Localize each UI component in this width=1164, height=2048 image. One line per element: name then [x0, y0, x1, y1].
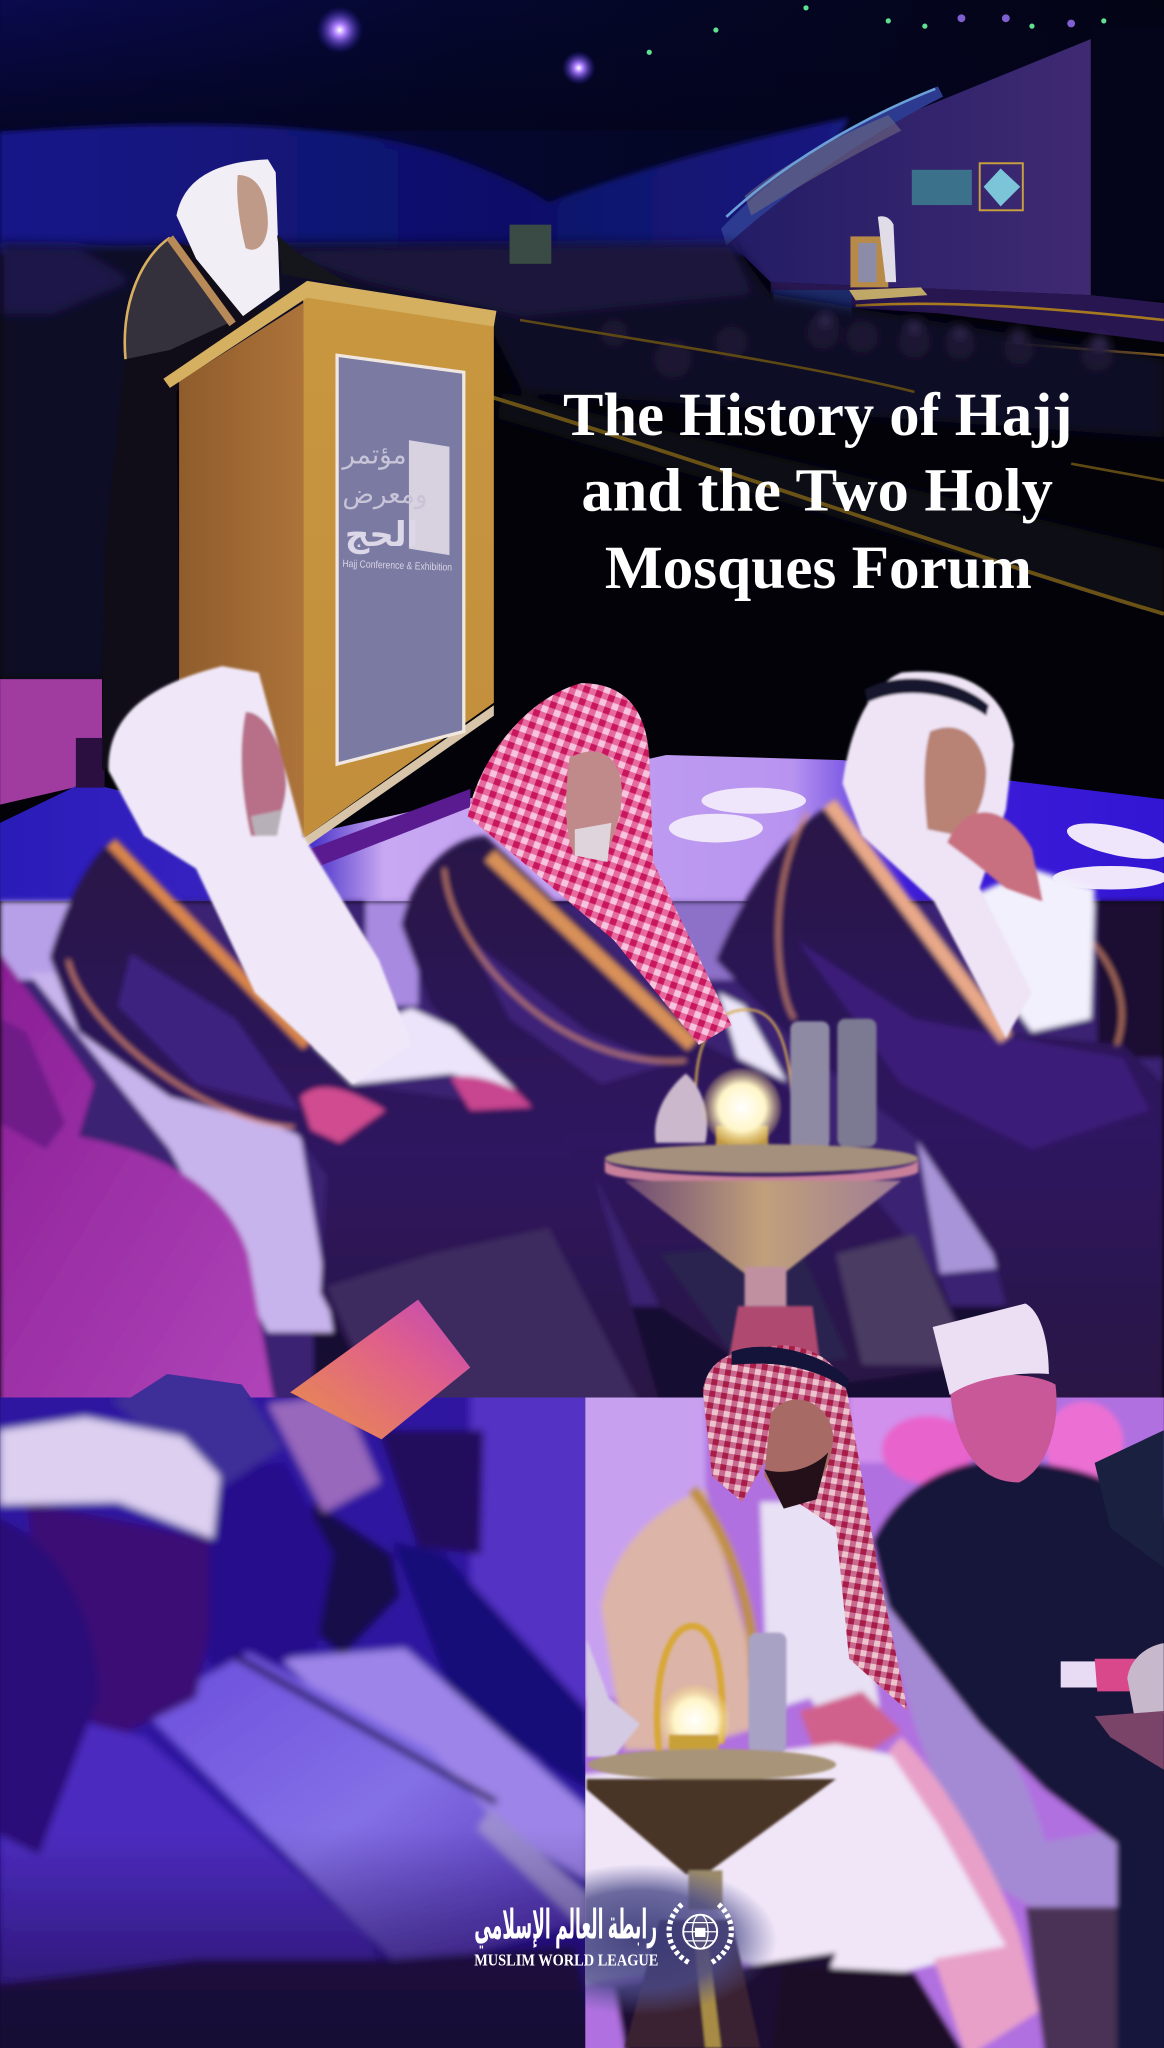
muslim world league logo	[474, 1902, 731, 1970]
guest with beige robe	[601, 1489, 901, 1757]
white robe and pink drape	[575, 1737, 1164, 2048]
table with lamp and bottle	[587, 1626, 836, 2048]
event title: The History of Hajj	[563, 381, 1072, 449]
speaker figure	[102, 159, 355, 771]
guest three robe	[716, 803, 1164, 1404]
exit door in hall	[510, 225, 551, 264]
fourth guest	[379, 1430, 588, 1789]
lectern screen with conference branding: ومعرض	[342, 479, 427, 510]
audience	[0, 243, 1164, 679]
guest in dark suit	[873, 1460, 1164, 1848]
side table with lamp and bottles	[603, 1006, 920, 1356]
top of patterned blue cap	[131, 1374, 251, 1398]
photo panel: conference hall and speaker at podium	[0, 0, 1164, 901]
magenta-robed guest	[0, 953, 274, 1404]
guest one robe	[50, 842, 660, 1404]
event title	[563, 381, 1072, 602]
emblem: globe with laurel	[669, 1904, 731, 1963]
lectern screen with conference branding	[337, 355, 464, 764]
orange cap	[290, 1300, 470, 1439]
shaded area behind logo	[585, 1866, 774, 2012]
curved blue wall	[0, 118, 849, 255]
guest two robe	[401, 836, 973, 1391]
guest head with red checkered headdress	[703, 1345, 908, 1711]
purple stage floor	[0, 755, 1164, 901]
event title: Mosques Forum	[605, 534, 1032, 602]
guest head with white hat	[933, 1304, 1057, 1482]
foreground guest	[0, 1515, 98, 1855]
guest one head and white headdress	[108, 666, 412, 1084]
forum logo on backdrop	[912, 163, 1023, 210]
small podium on stage	[850, 216, 896, 287]
event title: and the Two Holy	[581, 457, 1053, 525]
dark wing behind right stage	[1091, 26, 1164, 300]
guest two head and red checkered headdress	[468, 683, 732, 1045]
seats background	[0, 901, 1164, 1404]
second guest with blue cap	[111, 1374, 588, 1972]
lectern screen with conference branding: Hajj Conference & Exhibition	[342, 559, 452, 574]
third guest with patterned cap	[268, 1395, 588, 1881]
stage floor with gold lights	[771, 282, 1164, 355]
stage backdrop panel	[721, 39, 1091, 295]
lectern screen with conference branding: مؤتمر	[340, 440, 407, 471]
lectern screen with conference branding: الحج	[345, 516, 418, 555]
hall ceiling with stage lights	[0, 0, 1164, 248]
muslim world league logo: رابطة العالم الإسلامي	[474, 1902, 657, 1948]
dark foreground robes	[0, 1946, 601, 2048]
lectern	[163, 281, 496, 872]
english wordmark: MUSLIM WORLD LEAGUE	[474, 1951, 658, 1970]
lower left fade	[0, 1829, 601, 2048]
guest three head with black agal	[843, 672, 1042, 1038]
magenta stage edge	[0, 679, 102, 805]
lavender armchair	[878, 1587, 1126, 1907]
photo panel: guests at table	[585, 1304, 1164, 2048]
photo panel: guests wearing caps	[0, 1300, 601, 2048]
suit details and right side table	[1061, 1430, 1164, 1770]
white armchair	[29, 973, 333, 1332]
photo panel: seated dignitaries	[0, 666, 1164, 1404]
white light ovals on stage floor	[669, 788, 1164, 889]
first guest with white cap	[0, 1410, 386, 1984]
